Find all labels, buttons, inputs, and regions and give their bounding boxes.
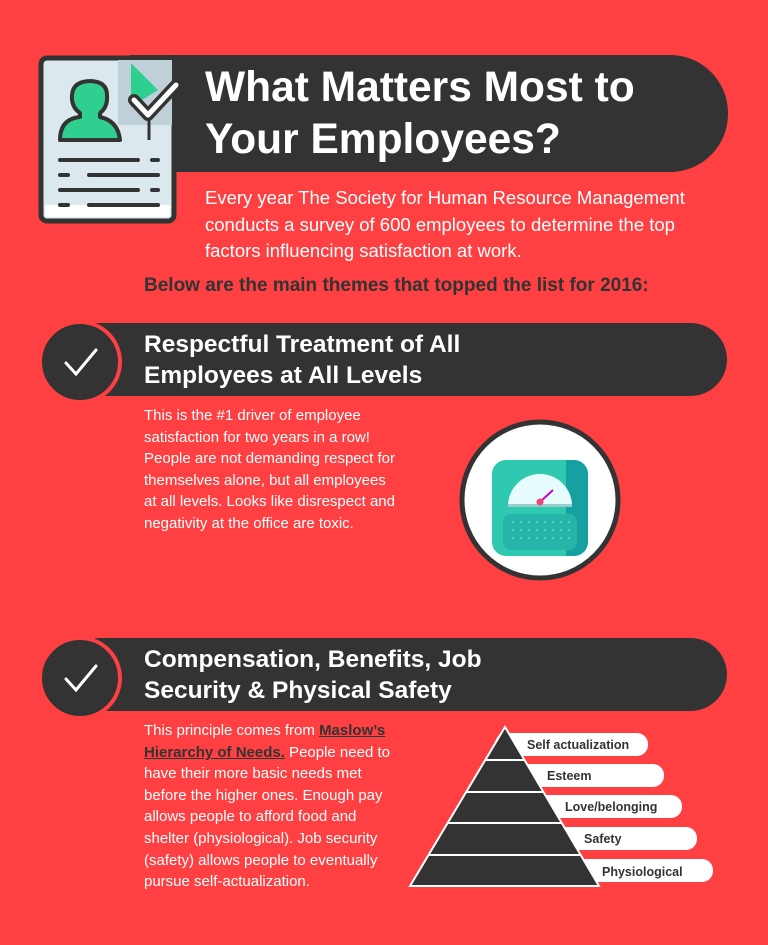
title band bbox=[130, 55, 728, 172]
section 1 check icon bbox=[38, 320, 122, 404]
section 1 text: at all levels. Looks like disrespect and bbox=[144, 493, 395, 510]
title: Your Employees? bbox=[205, 116, 561, 163]
chart: Maslow pyramid: Physiological bbox=[602, 865, 683, 879]
section 1 text: People are not demanding respect for bbox=[144, 450, 395, 467]
section 1 heading bbox=[144, 331, 460, 389]
section 2 check icon bbox=[38, 636, 122, 720]
section 2 text: This principle comes from Maslow’s Hierarchy of Needs. People need to have their more basic needs met before the higher ones. Enough pay allows people to afford food and shelter (physiological). Job security (safety) allows people to eventually pursue self-actualization. bbox=[144, 722, 390, 890]
section 2 heading: Compensation, Benefits, Job bbox=[144, 646, 482, 673]
section 1 text: This is the #1 driver of employee bbox=[144, 407, 361, 424]
section 1 text: satisfaction for two years in a row! bbox=[144, 429, 370, 446]
section 1 text: themselves alone, but all employees bbox=[144, 472, 386, 489]
title bbox=[205, 64, 635, 163]
section 2 banner bbox=[95, 638, 727, 711]
chart: Maslow pyramid bbox=[408, 725, 713, 887]
chart: Maslow pyramid: Esteem bbox=[547, 769, 591, 783]
section 2 heading: Security & Physical Safety bbox=[144, 677, 452, 704]
section 1 banner bbox=[95, 323, 727, 396]
icon: scale bbox=[460, 420, 620, 580]
section 1 text: negativity at the office are toxic. bbox=[144, 515, 354, 532]
chart: Maslow pyramid: Love/belonging bbox=[565, 800, 657, 814]
intro text: Every year The Society for Human Resource Management conducts a survey of 600 employees to determine the top factors influencing satisfaction at work. bbox=[205, 187, 685, 261]
icon: resume document bbox=[38, 56, 178, 224]
chart: Maslow pyramid: Safety bbox=[584, 832, 622, 846]
chart: Maslow pyramid: Self actualization bbox=[527, 738, 629, 752]
section 2 heading bbox=[144, 646, 482, 704]
subheading: Below are the main themes that topped the list for 2016: bbox=[144, 275, 649, 296]
section 1 text bbox=[144, 407, 395, 532]
section 1 heading: Employees at All Levels bbox=[144, 362, 422, 389]
title: What Matters Most to bbox=[205, 64, 635, 111]
section 1 heading: Respectful Treatment of All bbox=[144, 331, 460, 358]
